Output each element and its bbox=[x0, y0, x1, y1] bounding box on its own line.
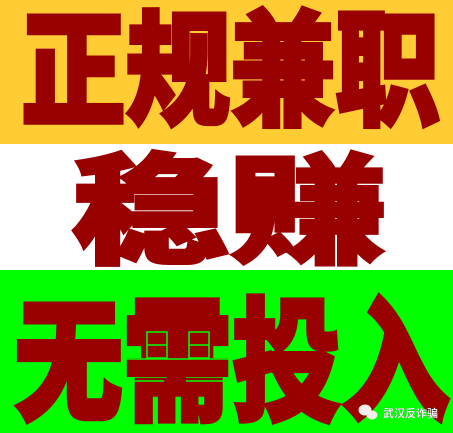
watermark text: 武汉反诈骗 bbox=[383, 406, 438, 420]
heading: 稳赚: 稳赚 bbox=[71, 146, 388, 280]
icon: chat bubbles bbox=[358, 404, 378, 420]
detail: 需 character windows bbox=[126, 332, 230, 381]
panel: green bottom band bbox=[0, 270, 453, 433]
panel: white middle band bbox=[0, 144, 453, 270]
panel: yellow top band bbox=[0, 0, 453, 144]
watermark: 武汉反诈骗 bbox=[358, 404, 438, 420]
